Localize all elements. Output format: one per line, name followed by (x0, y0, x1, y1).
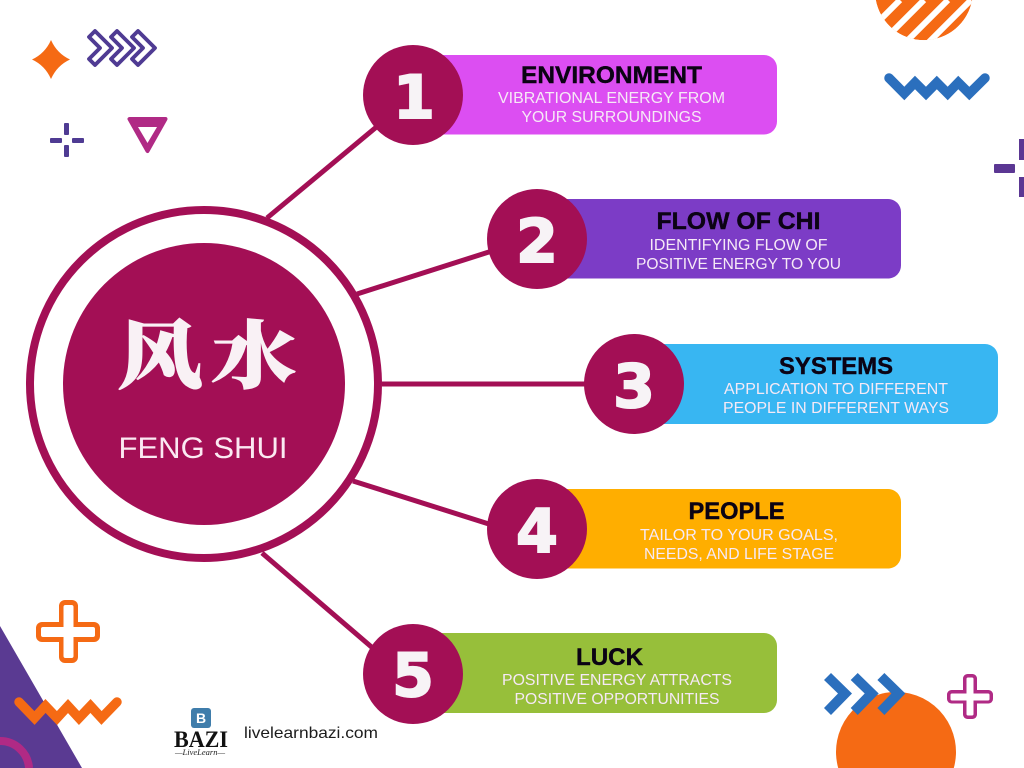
icon: magenta outlined plus (947, 674, 993, 719)
item 3: systems: 3 (613, 352, 655, 422)
english title: FENG SHUI (118, 432, 288, 465)
icon: orange striped circle (876, 0, 972, 40)
chinese title: 风水 (117, 297, 297, 403)
item 4: people: NEEDS, AND LIFE STAGE (644, 546, 834, 563)
item 3: systems (584, 334, 998, 434)
item 5: luck: POSITIVE ENERGY ATTRACTS (502, 672, 732, 689)
item 4: people: PEOPLE (688, 498, 784, 525)
connector lines (262, 124, 590, 650)
item 2: flow of chi: IDENTIFYING FLOW OF (650, 237, 828, 254)
logo: Bazi LiveLearn: —LiveLearn— (174, 748, 226, 757)
icon: blue zigzag (889, 78, 985, 94)
item 2: flow of chi: 2 (516, 207, 558, 277)
icon: orange circle bottom right (836, 692, 956, 768)
item 1: environment (363, 45, 777, 145)
logo: Bazi LiveLearn: B (196, 710, 206, 726)
item 3: systems: APPLICATION TO DIFFERENT (724, 381, 948, 398)
item 3: systems: SYSTEMS (779, 353, 893, 380)
item 4: people (487, 479, 901, 579)
item 1: environment: VIBRATIONAL ENERGY FROM (498, 90, 725, 107)
item 4: people: 4 (516, 497, 558, 567)
icon: orange outlined plus (36, 600, 100, 663)
item 5: luck: 5 (392, 641, 434, 711)
item 4: people: TAILOR TO YOUR GOALS, (640, 527, 838, 544)
logo: Bazi LiveLearn (174, 708, 228, 757)
icon: orange zigzag (19, 702, 117, 718)
item 2: flow of chi: POSITIVE ENERGY TO YOU (636, 256, 841, 273)
icon: orange star (32, 40, 70, 79)
icon: purple corner triangle (0, 626, 82, 768)
central circle: Feng Shui (30, 210, 378, 558)
item 5: luck (363, 624, 777, 724)
item 3: systems: PEOPLE IN DIFFERENT WAYS (723, 400, 949, 417)
item 5: luck: POSITIVE OPPORTUNITIES (514, 691, 720, 708)
icon: blue chevrons (824, 673, 905, 715)
icon: purple outlined chevrons (89, 31, 155, 65)
item 5: luck: LUCK (576, 644, 644, 671)
website url: livelearnbazi.com (244, 725, 378, 742)
icon: magenta arc (0, 741, 29, 768)
icon: partial purple dashed plus right (994, 139, 1024, 197)
logo: Bazi LiveLearn: BAZI (174, 727, 228, 752)
item 1: environment: 1 (393, 63, 435, 133)
icon: magenta triangle (130, 119, 166, 151)
item 2: flow of chi: FLOW OF CHI (656, 208, 820, 235)
item 1: environment: ENVIRONMENT (521, 62, 702, 89)
item 1: environment: YOUR SURROUNDINGS (522, 109, 702, 126)
item 2: flow of chi (487, 189, 901, 289)
icon: purple dashed plus (50, 123, 84, 157)
